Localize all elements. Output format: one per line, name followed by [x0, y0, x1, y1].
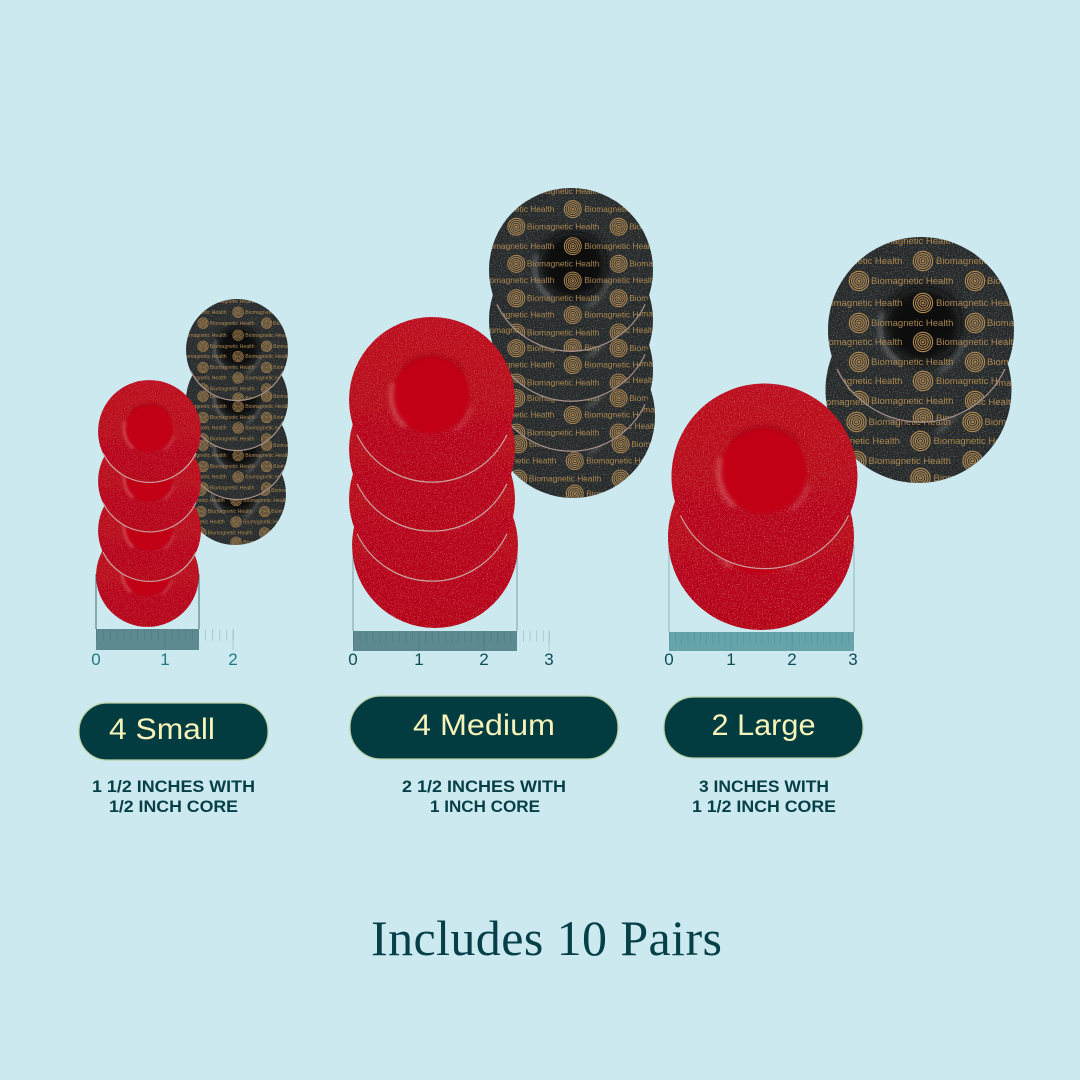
red small disc 1 — [98, 380, 201, 483]
black small disc 2: Biomagnetic Health — [245, 404, 290, 410]
black small disc 1: Biomagnetic Health — [210, 365, 255, 371]
caption: large size: 3 INCHES WITH — [699, 778, 829, 796]
black large disc 1: Biomagnetic Health — [987, 318, 1069, 329]
black medium disc 3: Biomagnetic Health — [527, 427, 600, 437]
black medium disc 3: Biomagnetic Health — [527, 393, 600, 403]
black small disc 2: Biomagnetic Health — [273, 437, 318, 443]
black small disc 3: Biomagnetic Health — [210, 486, 255, 492]
pill: 4 Medium — [350, 696, 618, 759]
group: small patches — [78, 299, 288, 812]
black medium disc 4: Biomagnetic Health — [631, 404, 704, 414]
black large disc 2: Biomagnetic Health — [934, 473, 1016, 484]
red small stack — [96, 380, 201, 627]
pill: 2 Large — [664, 697, 863, 758]
black small disc 2: Biomagnetic Health — [210, 415, 255, 421]
black medium disc 2: Biomagnetic Health — [584, 360, 657, 370]
black medium disc 2: Biomagnetic Health — [527, 308, 600, 318]
black small disc 4: Biomagnetic Health — [243, 520, 288, 526]
black medium disc 4: Biomagnetic Health — [586, 421, 659, 431]
black small disc 1 — [186, 299, 288, 402]
black medium disc 1: Biomagnetic Health — [527, 293, 600, 303]
large ruler: 2 — [787, 650, 797, 669]
black small disc 1: Biomagnetic Health — [245, 396, 290, 402]
black small disc 1: Biomagnetic Health — [210, 387, 255, 393]
red small disc 2 — [98, 430, 201, 532]
red medium disc 1 — [349, 317, 515, 483]
black medium disc 2: Biomagnetic Health — [527, 343, 600, 353]
black small disc 1: Biomagnetic Health — [273, 365, 318, 371]
caption: medium size — [402, 778, 566, 816]
large ruler — [664, 545, 858, 669]
black medium disc 1: Biomagnetic Health — [629, 258, 702, 268]
black small disc 4: Biomagnetic Health — [208, 531, 253, 537]
black small disc 4: Biomagnetic Health — [180, 520, 225, 526]
black small disc 4: Biomagnetic Health — [243, 540, 288, 546]
black large disc 1: Biomagnetic Health — [820, 337, 902, 348]
black large disc 2: Biomagnetic Health — [934, 436, 1016, 447]
black small disc 3: Biomagnetic Health — [245, 453, 290, 459]
red large stack — [668, 384, 858, 630]
black large disc 2: Biomagnetic Health — [868, 378, 951, 389]
black large disc 2: Biomagnetic Health — [818, 436, 900, 447]
black medium disc 1: Biomagnetic Health — [527, 327, 600, 337]
black medium disc 1: Biomagnetic Health — [629, 221, 702, 231]
black large disc 1: Biomagnetic Health — [871, 318, 953, 329]
black medium disc 3: Biomagnetic Health — [527, 358, 600, 368]
black large disc 2: Biomagnetic Health — [984, 417, 1067, 428]
black small disc 3: Biomagnetic Health — [210, 464, 255, 470]
black small disc 1: Biomagnetic Health — [245, 310, 290, 316]
black small disc 2: Biomagnetic Health — [182, 404, 227, 410]
black medium disc 1: Biomagnetic Health — [584, 204, 657, 214]
black medium disc 4: Biomagnetic Health — [529, 439, 602, 449]
black large disc 1: Biomagnetic Health — [936, 413, 1018, 424]
black medium disc 2 — [489, 295, 653, 402]
black medium disc 1 — [489, 188, 653, 352]
black large disc 2: Biomagnetic Health — [868, 417, 951, 428]
black small disc 1: Biomagnetic Health — [182, 354, 227, 360]
black medium disc 1: Biomagnetic Health — [584, 275, 657, 285]
black small disc 4: Biomagnetic Health — [271, 509, 316, 515]
red medium disc 2 — [349, 366, 515, 532]
black medium disc 1: Biomagnetic Health — [629, 293, 702, 303]
black small disc 2: Biomagnetic Health — [210, 394, 255, 400]
black medium disc 2: Biomagnetic Health — [584, 325, 657, 335]
red small disc 4 — [96, 524, 199, 627]
medium ruler: 0 — [348, 650, 358, 669]
black large disc 2: Biomagnetic Health — [934, 397, 1016, 408]
black medium disc 3: Biomagnetic Health — [629, 427, 702, 437]
black large disc 2: Biomagnetic Health — [984, 456, 1067, 467]
black small disc 1: Biomagnetic Health — [210, 321, 255, 327]
black medium disc 3: Biomagnetic Health — [629, 358, 702, 368]
black medium disc 3: Biomagnetic Health — [584, 375, 657, 385]
large ruler: 1 — [726, 650, 736, 669]
black large disc 1: Biomagnetic Health — [871, 236, 953, 247]
medium ruler — [348, 545, 554, 669]
black large disc 1: Biomagnetic Health — [987, 276, 1069, 287]
red medium disc 4 — [352, 462, 518, 628]
pill: 2 Large: 2 Large — [712, 709, 816, 742]
large ruler: 0 — [664, 650, 674, 669]
black small disc 4: Biomagnetic Health — [271, 488, 316, 494]
black small disc 3 — [194, 424, 288, 500]
black large disc 1: Biomagnetic Health — [871, 396, 953, 407]
black small disc 1: Biomagnetic Health — [273, 344, 318, 350]
large ruler: 3 — [848, 650, 858, 669]
red small disc 3 — [98, 479, 201, 582]
black small disc 3: Biomagnetic Health — [182, 453, 227, 459]
black medium disc 2: Biomagnetic Health — [482, 325, 555, 335]
small ruler — [91, 574, 238, 669]
black small disc 2 — [186, 375, 288, 452]
black large disc 1: Biomagnetic Health — [820, 256, 902, 267]
black small disc 3: Biomagnetic Health — [273, 464, 318, 470]
black small disc 3: Biomagnetic Health — [245, 475, 290, 481]
black small disc 3: Biomagnetic Health — [182, 475, 227, 481]
black small disc 3: Biomagnetic Health — [273, 486, 318, 492]
black medium disc 1: Biomagnetic Health — [482, 275, 555, 285]
black large disc 1: Biomagnetic Health — [936, 337, 1018, 348]
black small disc 2: Biomagnetic Health — [210, 437, 255, 443]
black medium disc 4 — [512, 390, 655, 498]
black medium disc 4: Biomagnetic Health — [529, 473, 602, 483]
title: Includes 10 Pairs: Includes 10 Pairs — [371, 910, 722, 966]
black medium disc 1: Biomagnetic Health — [527, 258, 600, 268]
black large disc 2: Biomagnetic Health — [868, 456, 951, 467]
black medium disc 2: Biomagnetic Health — [527, 377, 600, 387]
black medium disc 4: Biomagnetic Health — [586, 456, 659, 466]
black medium disc 4: Biomagnetic Health — [586, 488, 659, 498]
caption: large size: 1 1/2 INCH CORE — [692, 798, 836, 816]
black large disc 1: Biomagnetic Health — [987, 357, 1069, 368]
caption: small size: 1/2 INCH CORE — [109, 798, 238, 816]
black medium disc 2: Biomagnetic Health — [629, 343, 702, 353]
black small disc 3: Biomagnetic Health — [210, 443, 255, 449]
black medium disc 1: Biomagnetic Health — [482, 310, 555, 320]
group: large patches — [663, 237, 1014, 812]
black small disc 4: Biomagnetic Health — [208, 488, 253, 494]
small ruler: 2 — [228, 650, 238, 669]
black small disc 1: Biomagnetic Health — [273, 387, 318, 393]
black large disc 1 — [828, 237, 1014, 423]
black medium disc 4: Biomagnetic Health — [529, 404, 602, 414]
black medium disc 1: Biomagnetic Health — [482, 204, 555, 214]
black medium disc 3: Biomagnetic Health — [482, 375, 555, 385]
black medium disc 4: Biomagnetic Health — [484, 456, 557, 466]
caption: large size — [692, 778, 836, 816]
black large disc 1: Biomagnetic Health — [871, 357, 953, 368]
black small disc 2: Biomagnetic Health — [273, 394, 318, 400]
pill: 4 Small — [79, 703, 268, 760]
black small disc 1: Biomagnetic Health — [245, 354, 290, 360]
black large disc 2 — [826, 356, 1012, 483]
black small disc 2: Biomagnetic Health — [245, 426, 290, 432]
black small disc 1: Biomagnetic Health — [182, 310, 227, 316]
black large disc 2: Biomagnetic Health — [818, 397, 900, 408]
black medium disc 3: Biomagnetic Health — [482, 410, 555, 420]
black large disc 1: Biomagnetic Health — [820, 298, 902, 309]
black medium disc 4: Biomagnetic Health — [631, 473, 704, 483]
black medium disc 1: Biomagnetic Health — [629, 327, 702, 337]
black large disc 1: Biomagnetic Health — [936, 256, 1018, 267]
black large disc 1: Biomagnetic Health — [820, 376, 902, 387]
pill: 4 Medium: 4 Medium — [413, 709, 555, 742]
black small disc 3: Biomagnetic Health — [273, 443, 318, 449]
caption: small size — [92, 778, 255, 816]
black medium stack — [489, 188, 655, 498]
black small disc 2: Biomagnetic Health — [273, 415, 318, 421]
black small disc 4: Biomagnetic Health — [208, 509, 253, 515]
black medium disc 1: Biomagnetic Health — [527, 221, 600, 231]
black medium disc 3 — [511, 345, 653, 452]
black medium disc 2: Biomagnetic Health — [629, 377, 702, 387]
black small disc 1: Biomagnetic Health — [182, 333, 227, 339]
black large disc 1: Biomagnetic Health — [987, 396, 1069, 407]
black small disc 1: Biomagnetic Health — [245, 333, 290, 339]
black small stack — [186, 299, 288, 545]
black small disc 4: Biomagnetic Health — [271, 531, 316, 537]
red medium disc 3 — [349, 416, 515, 582]
pill: 4 Small: 4 Small — [109, 713, 215, 746]
black large disc 1: Biomagnetic Health — [871, 276, 953, 287]
red medium stack — [349, 317, 518, 628]
black medium disc 4: Biomagnetic Health — [484, 421, 557, 431]
black medium disc 1: Biomagnetic Health — [584, 241, 657, 251]
red large disc 1 — [672, 384, 858, 570]
small ruler: 0 — [91, 650, 101, 669]
black small disc 1: Biomagnetic Health — [182, 376, 227, 382]
black medium disc 1: Biomagnetic Health — [527, 186, 600, 196]
caption: medium size: 2 1/2 INCHES WITH — [402, 778, 566, 796]
black small disc 1: Biomagnetic Health — [210, 299, 255, 305]
caption: small size: 1 1/2 INCHES WITH — [92, 778, 255, 796]
black medium disc 2: Biomagnetic Health — [482, 360, 555, 370]
black small disc 4 — [194, 474, 286, 545]
red large disc 2 — [668, 444, 854, 630]
black large stack — [826, 237, 1014, 483]
black medium disc 4: Biomagnetic Health — [631, 439, 704, 449]
black medium disc 1: Biomagnetic Health — [584, 342, 657, 352]
medium ruler: 1 — [414, 650, 424, 669]
black small disc 1: Biomagnetic Health — [210, 344, 255, 350]
caption: medium size: 1 INCH CORE — [430, 798, 540, 816]
black small disc 1: Biomagnetic Health — [273, 321, 318, 327]
black small disc 4: Biomagnetic Health — [243, 498, 288, 504]
small ruler: 1 — [160, 650, 170, 669]
black large disc 1: Biomagnetic Health — [936, 376, 1018, 387]
black small disc 2: Biomagnetic Health — [182, 426, 227, 432]
medium ruler: 3 — [544, 650, 554, 669]
black medium disc 1: Biomagnetic Health — [584, 310, 657, 320]
black medium disc 2: Biomagnetic Health — [629, 308, 702, 318]
group: medium patches — [348, 188, 655, 812]
black medium disc 1: Biomagnetic Health — [482, 241, 555, 251]
black small disc 1: Biomagnetic Health — [245, 376, 290, 382]
black medium disc 3: Biomagnetic Health — [629, 393, 702, 403]
medium ruler: 2 — [479, 650, 489, 669]
black medium disc 3: Biomagnetic Health — [584, 410, 657, 420]
black large disc 2: Biomagnetic Health — [984, 378, 1067, 389]
black small disc 4: Biomagnetic Health — [180, 498, 225, 504]
black large disc 1: Biomagnetic Health — [936, 298, 1018, 309]
